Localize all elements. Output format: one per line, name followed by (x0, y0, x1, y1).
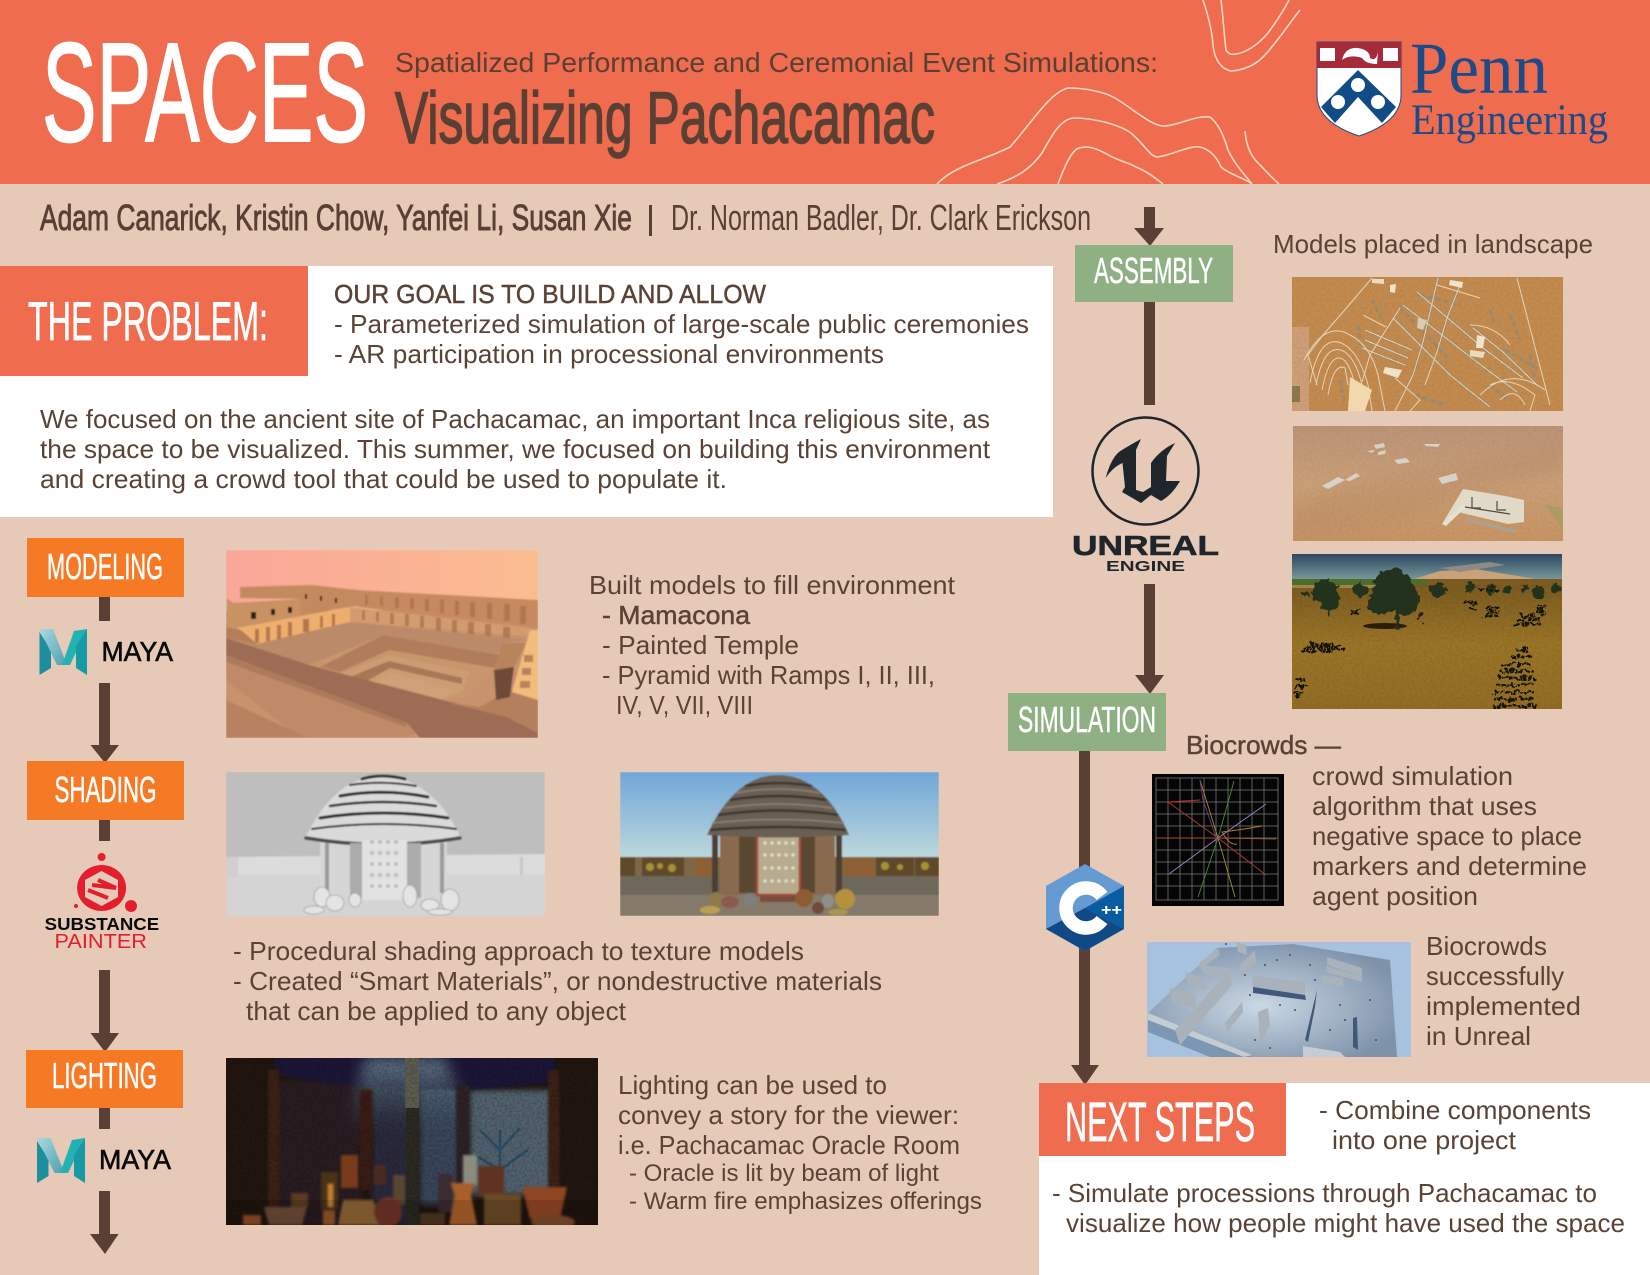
step: modeling: MODELING (47, 546, 163, 587)
image: biocrowds in unreal (1147, 942, 1411, 1057)
step: assembly: ASSEMBLY (1094, 250, 1213, 291)
text: lighting description: Lighting can be used to (618, 1070, 887, 1100)
heading: next steps (1039, 1083, 1286, 1156)
text: built models: - Painted Temple (602, 630, 799, 660)
step: lighting (26, 1050, 183, 1108)
icon: Unreal Engine logo: ENGINE (1106, 558, 1185, 575)
step: simulation: SIMULATION (1018, 699, 1156, 740)
text: lighting description (618, 1070, 982, 1215)
problem paragraph (40, 404, 991, 494)
logo: Penn Engineering (1317, 28, 1608, 144)
text: biocrowds implemented: in Unreal (1426, 1021, 1531, 1051)
image: landscape aerial (1293, 426, 1563, 541)
icon: C++ logo: ++ (1101, 902, 1122, 919)
authors line: Adam Canarick, Kristin Chow, Yanfei Li, Susan Xie (40, 197, 632, 238)
goal text: - AR participation in processional environments (334, 339, 884, 369)
heading: the problem: THE PROBLEM: (28, 290, 268, 352)
text: lighting description: - Oracle is lit by beam of light (629, 1160, 939, 1187)
text: crowd simulation description: algorithm that uses (1312, 791, 1537, 821)
problem paragraph: the space to be visualized. This summer, we focused on building this environment (40, 434, 991, 464)
step: shading: SHADING (54, 769, 156, 810)
logo: Penn Engineering: Penn (1410, 28, 1548, 109)
text: lighting description: - Warm fire emphasizes offerings (629, 1188, 982, 1215)
logo: Penn Engineering: Engineering (1411, 97, 1608, 144)
arrow: lighting stem (99, 1108, 110, 1129)
text: biocrowds implemented: Biocrowds (1426, 931, 1547, 961)
next steps list: into one project (1332, 1125, 1517, 1155)
text: crowd simulation description: markers and determine (1312, 851, 1587, 881)
next steps list (1052, 1095, 1625, 1238)
heading: next steps: NEXT STEPS (1065, 1090, 1255, 1153)
text: lighting description: i.e. Pachacamac Oracle Room (618, 1130, 960, 1160)
title: Visualizing Pachacamac: Visualizing Pachacamac (395, 78, 935, 159)
heading: models placed: Models placed in landscape (1273, 229, 1593, 259)
authors line: Dr. Norman Badler, Dr. Clark Erickson (671, 197, 1091, 238)
icon: Unreal Engine logo (1072, 418, 1219, 575)
step: modeling (27, 538, 184, 597)
text: crowd simulation description (1312, 761, 1587, 911)
goal text: OUR GOAL IS TO BUILD AND ALLOW (334, 279, 766, 309)
panel: the problem (0, 266, 1053, 517)
text: built models: - Pyramid with Ramps I, II, III, (602, 660, 935, 690)
image: landscape with trees (1292, 554, 1562, 709)
problem paragraph: and creating a crowd tool that could be used to populate it. (40, 464, 727, 494)
icon: Maya logo second (37, 1138, 171, 1183)
step: simulation (1008, 693, 1166, 751)
arrow: simulation to next steps (1071, 751, 1099, 1085)
text: biocrowds heading: Biocrowds — (1186, 730, 1341, 760)
icon: Substance Painter logo: SUBSTANCE (45, 914, 159, 934)
panel: next steps (1039, 1083, 1650, 1275)
image: landscape map view (1292, 277, 1563, 411)
step: assembly (1075, 245, 1233, 302)
arrow: shading to lighting (90, 970, 119, 1052)
topographic contour lines (937, 0, 1300, 184)
step: lighting: LIGHTING (52, 1055, 157, 1096)
goal text: - Parameterized simulation of large-scale public ceremonies (334, 309, 1029, 339)
text: shading description: - Procedural shading approach to texture models (233, 936, 804, 966)
arrow: unreal to simulation (1135, 584, 1164, 694)
icon: Substance Painter logo: PAINTER (54, 931, 147, 953)
text: built models (589, 570, 956, 720)
icon: Substance Painter logo (45, 853, 159, 953)
image: textured hut render (620, 772, 939, 916)
next steps list: - Simulate processions through Pachacamac to (1052, 1178, 1597, 1208)
text: crowd simulation description: crowd simulation (1312, 761, 1513, 791)
title: SPACES: SPACES (42, 13, 368, 171)
arrow: modeling to shading (90, 683, 119, 763)
image: Mamacona model render (226, 550, 538, 738)
next steps list: visualize how people might have used the space (1066, 1208, 1625, 1238)
icon: C++ logo (1046, 864, 1124, 951)
subtitle: Spatialized Performance and Ceremonial Event Simulations: (395, 47, 1158, 78)
text: biocrowds implemented: implemented (1426, 991, 1581, 1021)
text: biocrowds implemented: successfully (1426, 961, 1564, 991)
problem paragraph: We focused on the ancient site of Pachacamac, an important Inca religious site, as (40, 404, 990, 434)
heading: the problem (0, 266, 308, 376)
image: Pachacamac oracle room (226, 1058, 598, 1229)
arrow: modeling stem (99, 597, 110, 621)
step: shading (27, 761, 184, 820)
text: biocrowds implemented (1426, 931, 1581, 1051)
header banner (0, 0, 1650, 184)
text: lighting description: convey a story for the viewer: (618, 1100, 959, 1130)
goal text (334, 279, 1029, 369)
text: built models: IV, V, VII, VIII (616, 690, 753, 720)
text: crowd simulation description: negative space to place (1312, 821, 1582, 851)
next steps list: - Combine components (1319, 1095, 1591, 1125)
icon: Maya logo second: MAYA (99, 1144, 171, 1175)
text: built models: Built models to fill environment (589, 570, 956, 600)
text: built models: - Mamacona (602, 600, 751, 630)
icon: Unreal Engine logo: UNREAL (1072, 530, 1219, 561)
text: shading description: that can be applied to any object (246, 996, 627, 1026)
arrow: assembly stem (1144, 302, 1155, 405)
text: shading description: - Created “Smart Materials”, or nondestructive materials (233, 966, 882, 996)
icon: Maya logo (40, 629, 173, 675)
text: crowd simulation description: agent position (1312, 881, 1478, 911)
text: shading description (233, 936, 882, 1026)
arrow: lighting down (90, 1191, 119, 1254)
image: untextured hut render (226, 772, 545, 916)
icon: Maya logo: MAYA (102, 636, 173, 667)
arrow: shading stem (99, 820, 110, 841)
image: biocrowds plot (1152, 774, 1284, 906)
arrow: into assembly (1134, 207, 1164, 246)
